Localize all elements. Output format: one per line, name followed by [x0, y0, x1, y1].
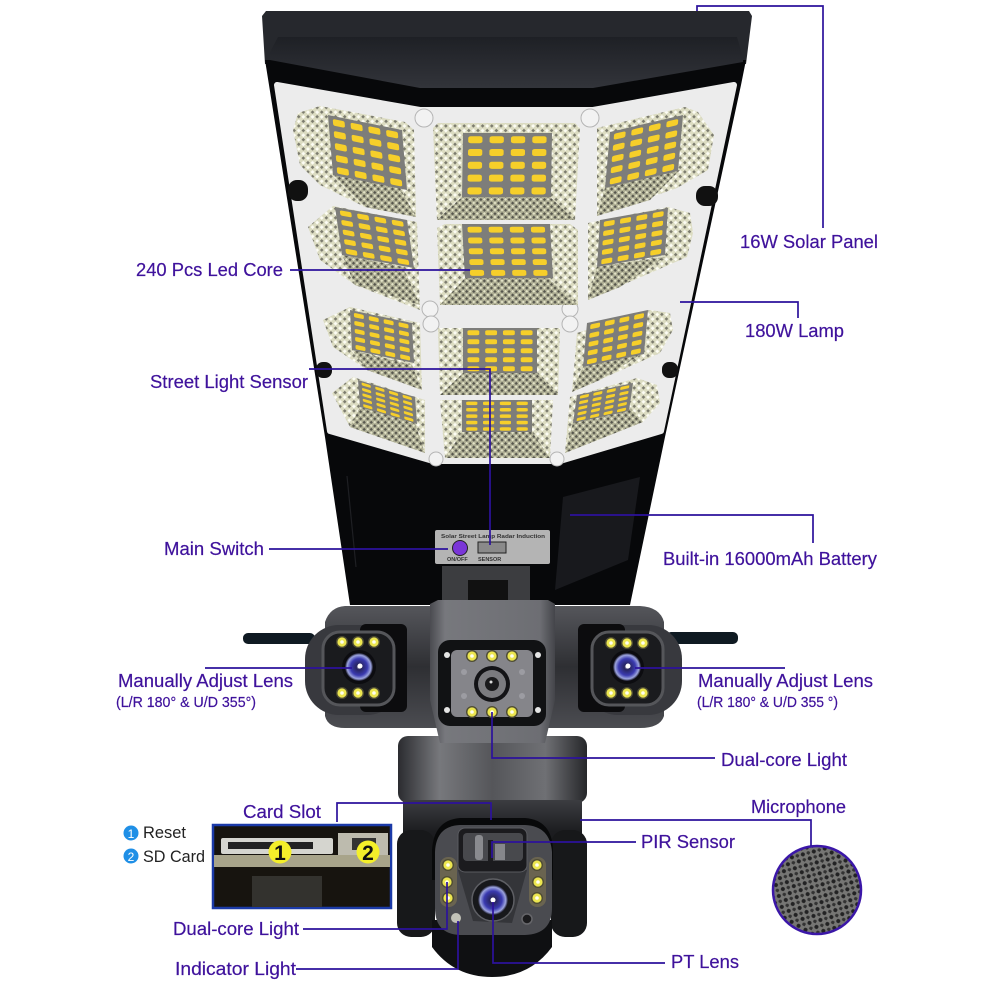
side arm left — [397, 830, 435, 937]
screws — [444, 652, 541, 713]
lamp housing — [262, 11, 752, 605]
module row 4 center — [440, 400, 553, 458]
center face plate — [451, 650, 533, 717]
line: main switch — [269, 548, 448, 550]
plate notches — [288, 180, 718, 378]
label: microphone: Microphone — [751, 796, 846, 817]
line: lamp — [680, 302, 798, 318]
label: battery: Built-in 16000mAh Battery — [663, 548, 878, 569]
module row 3 right — [572, 310, 673, 392]
side arm right — [551, 830, 587, 937]
yellow marker 1 — [268, 840, 292, 865]
label: right lens: Manually Adjust Lens — [698, 670, 873, 691]
center camera block — [430, 600, 555, 743]
left LED bar — [440, 857, 457, 907]
module row 1 center — [433, 123, 580, 220]
legend badge 1: 1 — [128, 827, 135, 841]
white reflector plate — [277, 85, 734, 461]
labels — [116, 231, 878, 979]
module row 3 center — [438, 328, 560, 395]
center lens — [474, 666, 510, 702]
label: left lens range: (L/R 180° & U/D 355°) — [116, 695, 256, 711]
microphone — [773, 846, 861, 934]
label: street light sensor: Street Light Sensor — [150, 371, 308, 392]
label: main switch: Main Switch — [164, 538, 264, 559]
module row 4 right — [565, 378, 660, 453]
label: PIR sensor: PIR Sensor — [641, 831, 735, 852]
module row 1 left — [293, 106, 416, 217]
IR dots — [461, 669, 525, 699]
face plate — [435, 825, 552, 935]
module row 4 left — [332, 377, 425, 453]
left lens housing — [305, 624, 407, 715]
on off button — [452, 540, 468, 556]
label: PT lens: PT Lens — [671, 951, 739, 972]
legend — [124, 824, 205, 866]
line: street light sensor — [309, 369, 490, 545]
yellow marker 1: 1 — [274, 842, 286, 865]
line: lower dual-core light — [303, 882, 447, 929]
hood — [270, 37, 743, 88]
label: indicator light: Indicator Light — [175, 958, 296, 979]
module row 1 right — [597, 107, 714, 216]
label: center dual-core light: Dual-core Light — [721, 749, 847, 770]
line: PT lens — [493, 902, 665, 963]
right LED bar — [529, 857, 546, 907]
yellow marker 2: 2 — [362, 842, 374, 865]
left cover outline — [347, 476, 356, 567]
SD slot — [338, 833, 388, 855]
legend badge 2: 2 — [128, 850, 135, 864]
module row 2 right — [588, 207, 693, 300]
label: left lens: Manually Adjust Lens — [118, 670, 293, 691]
upper camera — [305, 606, 682, 728]
legend reset: Reset — [143, 824, 186, 842]
card slot inset — [213, 825, 391, 908]
LED modules — [293, 106, 714, 458]
label: LED core: 240 Pcs Led Core — [136, 259, 283, 280]
battery cover facet — [555, 477, 640, 590]
small sensor — [522, 914, 532, 924]
line: microphone — [580, 820, 811, 846]
PIR sensor window — [458, 828, 527, 872]
label: card slot: Card Slot — [243, 801, 321, 822]
label: right lens range: (L/R 180° & U/D 355 °) — [697, 695, 838, 711]
switch label plate — [435, 530, 550, 564]
line: solar panel — [697, 6, 823, 228]
module row 3 left — [323, 307, 422, 390]
line: left lens — [205, 667, 352, 669]
module row 2 left — [308, 206, 420, 310]
line: LED core — [290, 269, 470, 271]
black arch — [432, 818, 553, 880]
label: lower dual-core light: Dual-core Light — [173, 918, 299, 939]
bottom dome — [432, 920, 552, 977]
line: card slot — [337, 803, 491, 822]
lens barrel — [252, 876, 322, 907]
line: battery — [570, 515, 813, 543]
center LEDs — [466, 650, 518, 718]
line: indicator light — [296, 921, 458, 969]
antennas — [243, 632, 738, 644]
line: center dual-core light — [492, 712, 715, 758]
card tray — [214, 855, 390, 867]
label: solar panel: 16W Solar Panel — [740, 231, 878, 252]
line: right lens — [635, 667, 785, 669]
mounting bracket — [442, 566, 530, 602]
PT lens — [472, 879, 514, 921]
sensor window — [478, 542, 506, 553]
solar panel top plate — [262, 11, 752, 64]
module row 2 center — [437, 224, 578, 305]
callout lines — [205, 6, 823, 969]
reset slot — [221, 838, 333, 854]
camera wings — [325, 606, 664, 728]
camera neck cylinder — [398, 736, 587, 803]
sensor caption: SENSOR — [478, 557, 501, 563]
lens panel — [458, 870, 527, 923]
yellow marker 2 — [356, 840, 380, 865]
plate heading: Solar Street Lamp Radar Induction — [441, 534, 546, 540]
PT camera body — [397, 800, 587, 977]
center face frame — [438, 640, 546, 726]
plate screw rings — [415, 109, 599, 466]
legend SD card: SD Card — [143, 848, 205, 866]
right lens housing — [578, 624, 682, 715]
lamp body — [265, 60, 746, 605]
battery compartment — [347, 476, 640, 590]
line: PIR sensor — [492, 842, 636, 858]
label: lamp: 180W Lamp — [745, 320, 844, 341]
on off caption: ON/OFF — [447, 557, 468, 563]
indicator light — [451, 913, 461, 923]
